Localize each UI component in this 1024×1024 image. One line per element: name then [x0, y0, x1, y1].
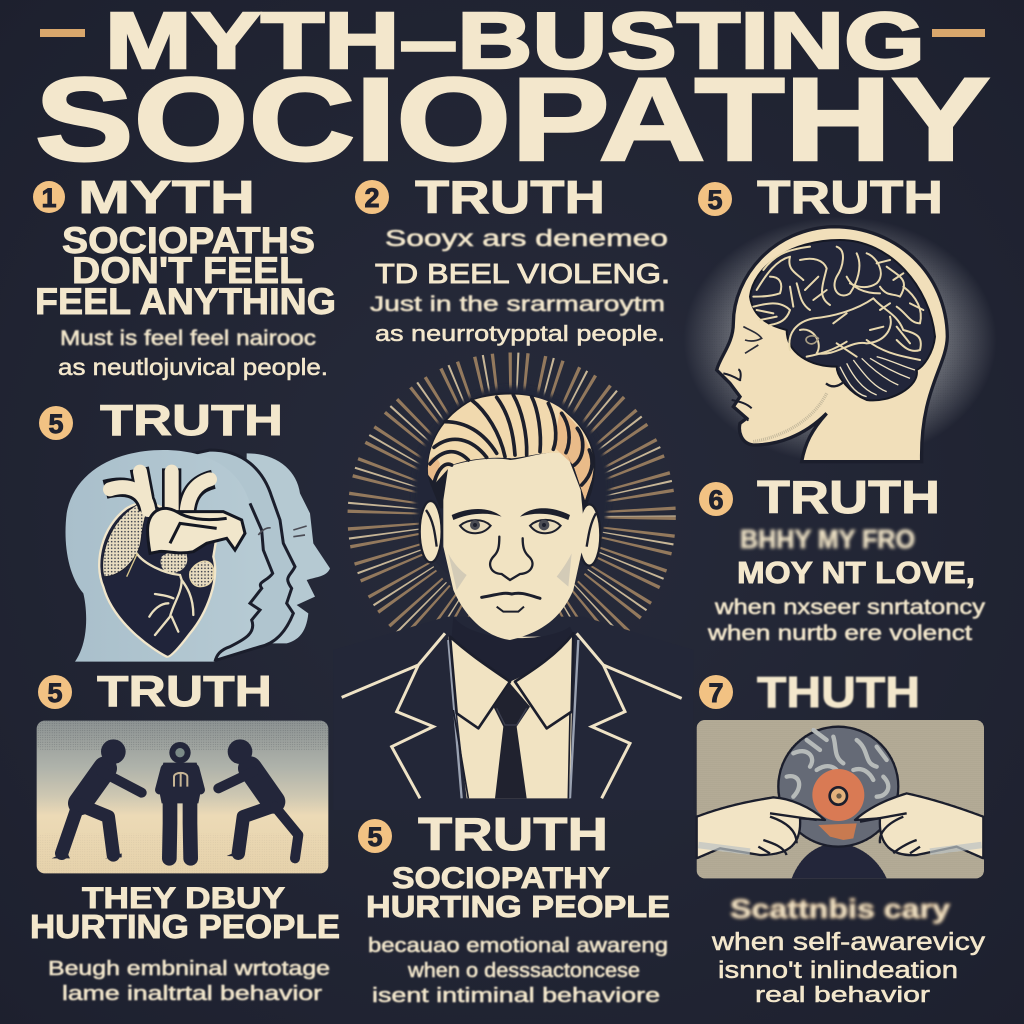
panel: truth brain [683, 171, 997, 463]
panel: truth 5 violence: lame inaltrtal behavior [62, 983, 322, 1005]
panel: truth 7: isnno't inlindeation [718, 957, 958, 984]
panel: myth 1: Must is feel feel nairooc [60, 327, 316, 350]
panel: myth 1: as neutlojuvical people. [58, 354, 328, 380]
panel: truth 7: 7 [708, 678, 724, 708]
sunburst rays [333, 387, 693, 810]
panel: truth 5 sociopathy: becauao emotional awareng [368, 935, 668, 957]
panel: truth 6: when nxseer snrtatoncy [714, 596, 986, 619]
panel: truth 6: 6 [708, 485, 724, 515]
panel: truth brain: TRUTH [757, 171, 943, 223]
panel: truth 5 sociopathy: 5 [367, 822, 383, 852]
panel: truth 2: Just in the srarmaroytm [370, 293, 665, 316]
panel: truth 7: THUTH [757, 668, 920, 717]
panel: truth 5 violence [30, 667, 340, 1005]
panel: truth 6: TRUTH [757, 471, 940, 523]
panel: truth 6: BHHY MY FRO [740, 524, 915, 554]
panel: truth 7 [697, 668, 986, 1007]
panel: truth brain: 5 [707, 185, 723, 215]
panel: truth 5 sociopathy: isent intiminal behaviore [372, 985, 660, 1007]
panel: truth 6: when nurtb ere volenct [707, 622, 972, 645]
panel: myth 1: SOCIOPATHS [62, 220, 315, 261]
panel: myth 1 [33, 171, 336, 380]
panel: truth 5 sociopathy: when o desssactoncese [407, 960, 640, 982]
panel: central portrait [333, 387, 693, 810]
panel: truth 5 sociopathy [358, 808, 670, 1007]
panel: truth 7: Scattnbis cary [730, 894, 950, 924]
panel: truth 5 sociopathy: HURTING PEOPLE [366, 889, 670, 924]
panel: truth 5 violence: TRUTH [97, 667, 272, 716]
panel: truth 5 sociopathy: SOCIOPATHY [392, 862, 610, 895]
panel: truth 2: TRUTH [415, 171, 605, 223]
man's head [420, 392, 600, 640]
panel: truth 2 [355, 171, 670, 346]
illustration: silhouettes hurting a person [37, 721, 328, 873]
panel: truth 5 violence: Beugh embninal wrtotage [48, 958, 330, 980]
panel: truth 2: TD BEEL VIOLENG. [375, 258, 670, 289]
panel: myth 1: 1 [41, 183, 57, 213]
panel: truth heart: TRUTH [100, 396, 283, 445]
panel: myth 1: DON'T FEEL [72, 250, 303, 291]
panel: truth 6 [699, 471, 986, 645]
panel: truth 6: MOY NT LOVE, [737, 555, 975, 590]
panel: truth 2: 2 [364, 183, 380, 213]
panel: truth 2: Sooyx ars denemeo [385, 225, 668, 251]
panel: myth 1: FEEL ANYTHING [35, 281, 336, 322]
illustration: hands and brain [697, 720, 984, 878]
illustration: heart inside overlapping heads [66, 450, 330, 662]
panel: truth 2: as neurrotypptal people. [375, 321, 665, 346]
panel: truth 5 sociopathy: TRUTH [418, 808, 608, 860]
panel: truth 5 violence: THEY DBUY [82, 882, 285, 915]
suit and shirt [342, 617, 682, 798]
title [35, 0, 990, 186]
panel: truth 5 violence: HURTING PEOPLE [30, 908, 340, 945]
panel: truth 7: real behavior [755, 982, 930, 1007]
panel: truth 7: when self-awarevicy [711, 928, 986, 956]
panel: truth heart: 5 [48, 409, 64, 439]
hair [428, 395, 594, 500]
panel: truth 5 violence: 5 [47, 678, 63, 708]
illustration: head profile with brain [683, 217, 997, 463]
panel: truth heart [39, 396, 330, 662]
title: SOCIOPATHY [35, 54, 990, 186]
panel: myth 1: MYTH [78, 171, 255, 223]
